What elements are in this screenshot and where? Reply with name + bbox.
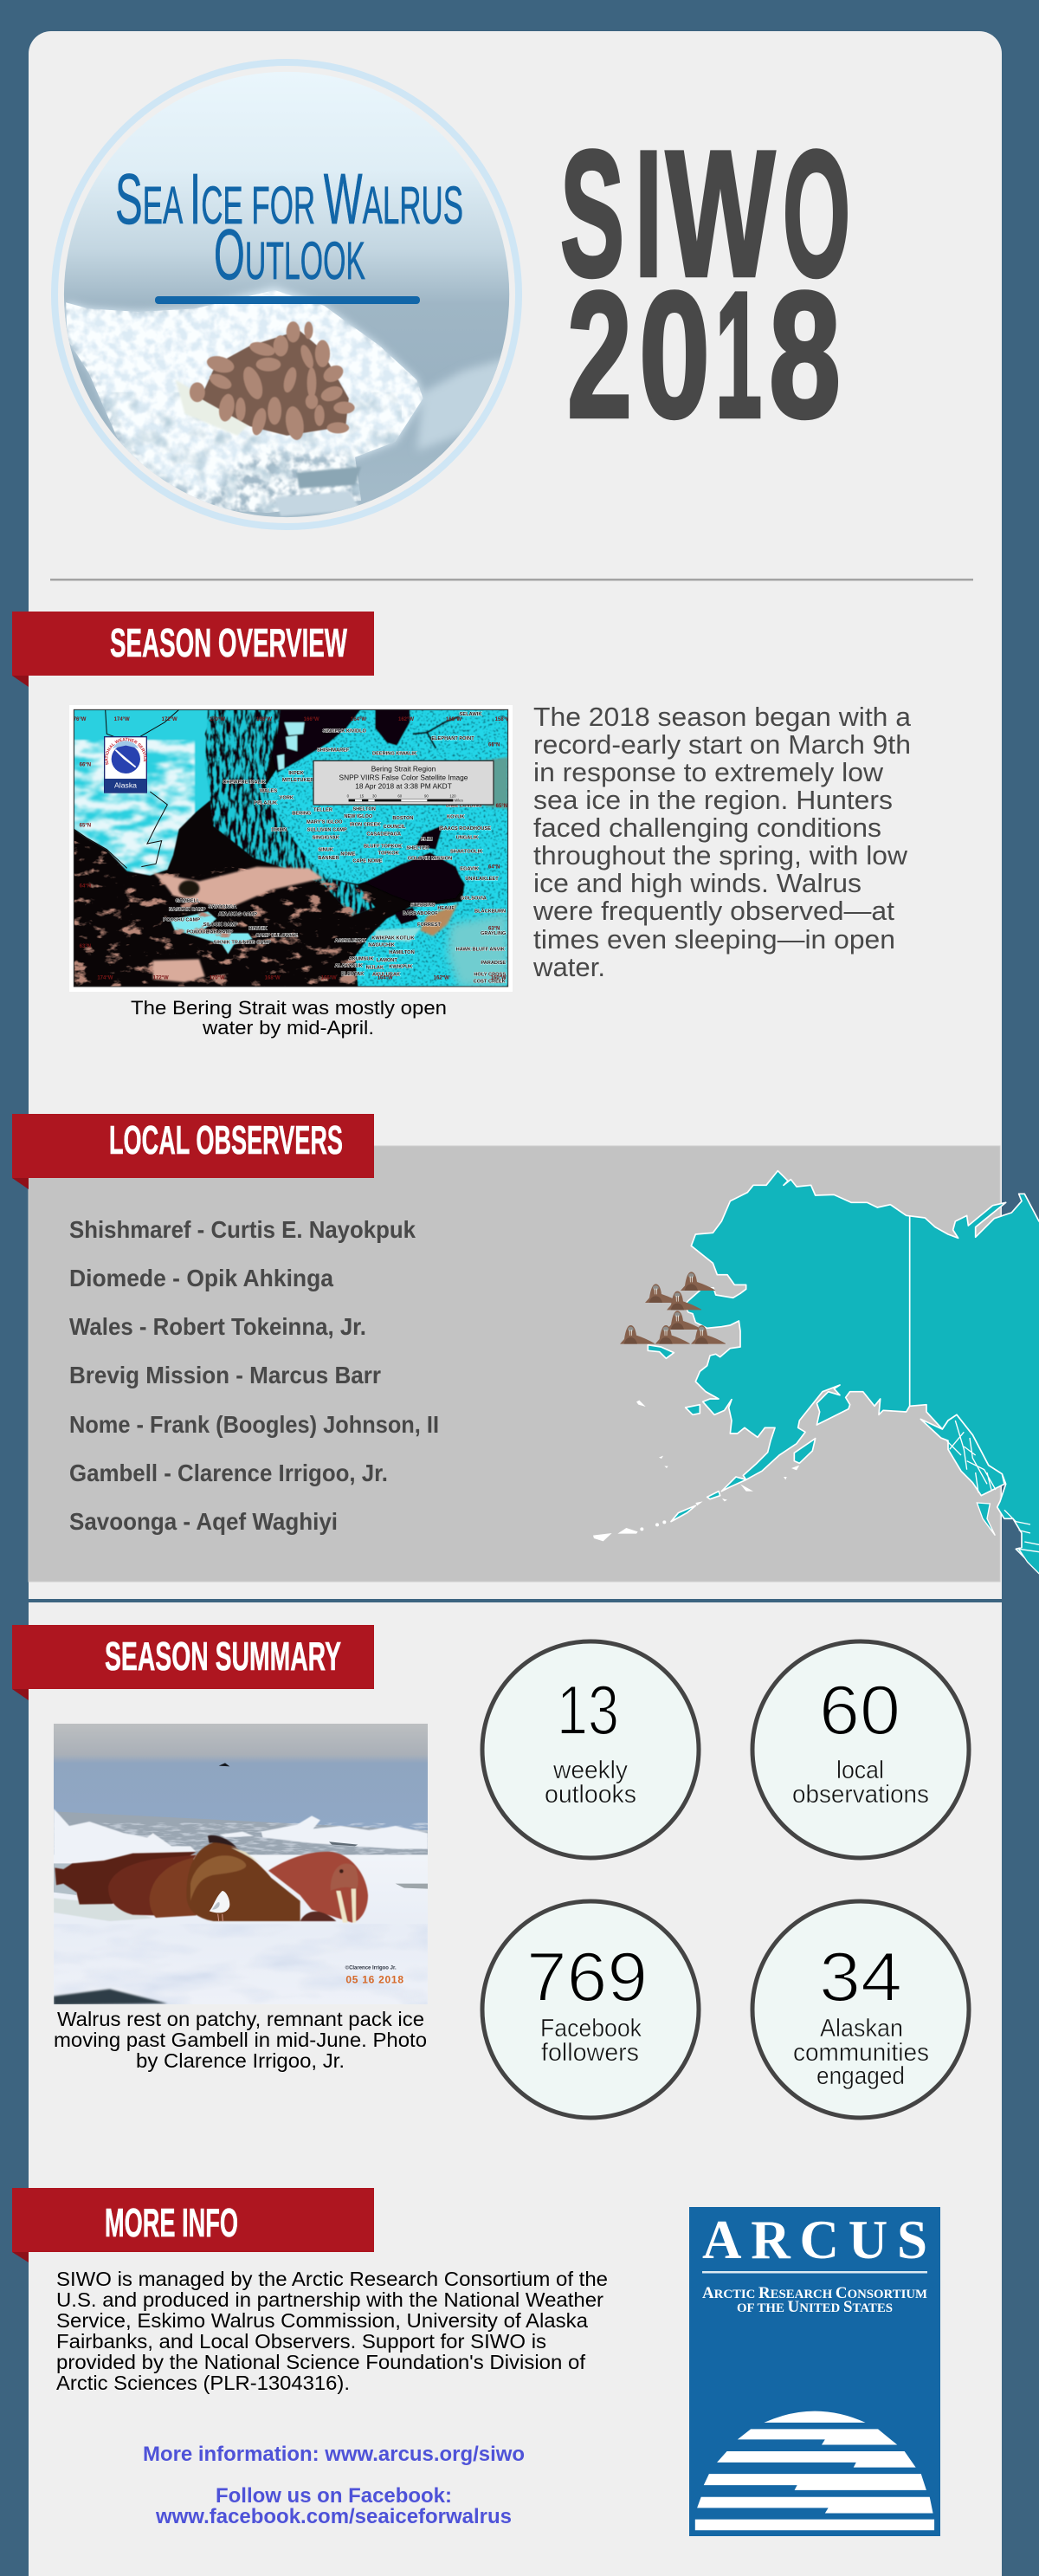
satellite: place labels: BARRABOROF [403,911,438,916]
photo: walrus resting on ice [54,1724,428,2005]
ARCUS logo: ARCTIC RESEARCH CONSORTIUM [702,2285,927,2302]
satellite: graticule labels: 162°W [398,717,414,722]
list: observer names: Nome - Frank (Boogles) Johnson, II [69,1411,439,1438]
satellite: clouds [74,841,394,987]
ARCUS dome emblem [695,2411,934,2530]
stat: 34 Alaskan communities engaged: Alaskan [820,2015,903,2042]
stat: 34 Alaskan communities engaged: engaged [816,2062,905,2090]
photo: gull [210,1891,229,1921]
satellite: title box: Bering Strait Region [371,765,436,773]
links: www.facebook.com/seaiceforwalrus [155,2505,512,2528]
season overview paragraph: water. [532,952,605,982]
satellite: title box: 18 Apr 2018 at 3:38 PM AKDT [355,782,452,791]
season overview paragraph: record-early start on March 9th [533,729,911,760]
satellite: graticule labels: 65°N [80,824,91,829]
stat: 13 weekly outlooks: outlooks [545,1781,636,1809]
satellite: place labels: UNGALIK [456,836,479,841]
photo: copyright stamp: 05 16 2018 [345,1973,403,1985]
satellite: place labels: SIKNIK TRAINING CAMP [214,941,271,946]
more info paragraph: SIWO is managed by the Arctic Research Consortium of the [56,2268,608,2290]
satellite: place labels: ELIM [421,838,433,843]
photo: copyright stamp [345,1965,403,1984]
satellite: place labels: KWIKPUK [389,965,413,970]
logo underline [155,296,420,304]
season overview paragraph: faced challenging conditions [533,812,881,843]
title: SIWO 2018: W [666,113,775,314]
satellite: graticule labels: 162°W [434,976,449,981]
satellite: graticule labels: 164°W [351,717,366,722]
satellite: title box: 60 [397,794,403,799]
satellite: place labels: KWIKPAK KOTLIK [371,935,415,941]
satellite: title box: Miles [455,798,463,802]
more info paragraph: Fairbanks, and Local Observers. Support for SIWO is [56,2330,546,2353]
stat: 60 local observations [752,1641,969,1858]
stat: 13 weekly outlooks: weekly [552,1757,628,1784]
satellite: graticule labels [70,717,511,981]
season overview paragraph: were frequently observed—at [532,896,894,926]
satellite: place labels: POOSHU CAMP [163,917,200,922]
section banner: Season Overview [12,612,374,687]
section banner: Season Overview: SEASON OVERVIEW [110,620,347,665]
links: Follow us on Facebook: [216,2484,452,2508]
more info paragraph [56,2268,608,2394]
satellite: place labels: CASADEPAGA [366,832,401,838]
satellite: place labels: IRON CREEK [350,823,381,828]
satellite: place labels: EGAVIK [460,867,480,872]
satellite: place labels: HAWK BLUFF ANVIK [456,948,506,953]
satellite: place labels: SAVOONGA [209,905,236,910]
satellite: place labels: SELAWIK [460,712,482,717]
more info paragraph: Arctic Sciences (PLR-1304316). [56,2372,350,2394]
satellite: place labels: SINGEAK KIVIDLO [323,728,367,734]
satellite: place labels: AKULURAK [372,973,401,978]
satellite: graticule labels: 65°N [496,804,507,809]
satellite: graticule labels: 64°N [488,865,500,871]
map: islands [648,1345,816,1522]
satellite: graticule labels: 66°N [80,763,91,768]
stat: 13 weekly outlooks: 13 [557,1672,619,1750]
walrus herd [190,321,355,442]
text: O [783,113,850,314]
satellite: place labels: KOYUK [447,814,465,819]
more info paragraph: U.S. and produced in partnership with the National Weather [56,2288,603,2311]
satellite: place labels: NOME [340,852,356,858]
satellite: title box: 0 [347,794,350,799]
satellite: graticule labels: 172°W [162,717,177,722]
satellite: title box [313,761,494,805]
satellite: place labels: GOLOVIN MISSION [408,857,452,862]
satellite: place labels: CAPE NOME [352,859,383,864]
satellite: place labels: SHAKTOOLIK [450,849,483,854]
season overview paragraph: The 2018 season began with a [533,702,912,732]
season overview paragraph: ice and high winds. Walrus [533,868,862,898]
photo caption: moving past Gambell in mid-June. Photo [54,2029,427,2051]
stat: 60 local observations: 60 [819,1672,900,1750]
satellite: graticule labels: 174°W [114,717,130,722]
ARCUS logo: ARCUS [702,2210,927,2270]
satellite: place labels: BETNIK [248,926,268,931]
satellite: graticule labels: 170°W [210,976,225,981]
photo: walruses [55,1835,368,1923]
title: SIWO 2018: 0 [639,255,710,455]
satellite: place labels: DIXON [271,828,287,833]
list: observer names: Diomede - Opik Ahkinga [69,1265,333,1291]
satellite: NWS Alaska logo: NATIONAL WEATHER SERVICE [105,738,147,765]
ARCUS logo: OF THE UNITED STATES [737,2299,893,2316]
stat: 13 weekly outlooks [482,1641,699,1858]
satellite: place labels [163,712,507,984]
map: Alaska panhandle islands [920,1414,1004,1496]
satellite: place labels: NEW IGLOO [344,814,373,819]
stat: 34 Alaskan communities engaged: 34 [819,1938,902,2016]
satellite: place labels: IKPEK [288,771,305,776]
satellite: place labels: GRAYLING [481,931,507,936]
satellite: place labels: UNALAKLEET [465,877,499,882]
section banner: Season Summary: SEASON SUMMARY [105,1634,341,1679]
satellite: place labels: DEERING KIWALIK [372,751,417,756]
stat: 60 local observations: observations [792,1781,929,1809]
list: observer names: Savoonga - Aqef Waghiyi [69,1508,338,1535]
stat: 769 Facebook followers: followers [541,2039,639,2067]
satellite: title box: 15 [359,794,365,799]
title: SIWO 2018: I [635,113,662,314]
more info paragraph: Service, Eskimo Walrus Commission, University of Alaska [56,2309,588,2332]
title: SIWO 2018: 1 [715,255,762,455]
satellite: graticule labels: 176°W [70,717,87,722]
satellite: place labels: NASKAK CAMP [169,907,206,912]
satellite: place labels: BLACKBURN [474,909,506,914]
stat: 769 Facebook followers [482,1901,699,2118]
satellite: graticule labels: 158°W [495,717,511,722]
satellite: place labels: FORREST [417,922,442,928]
satellite: place labels: HEAUF [437,906,455,911]
satellite: place labels: BERING [292,812,312,817]
satellite: place labels: AKUMSUK [349,957,374,962]
title: SIWO 2018: 2 [567,255,632,455]
satellite: place labels: PARADISE [481,961,506,966]
section banner: Season Summary [12,1625,374,1700]
season overview paragraph: in response to extremely low [533,757,884,787]
map: walrus markers [620,1272,726,1344]
title: SIWO 2018 [560,113,850,455]
satellite: place labels: BOSTON [392,816,413,821]
satellite: place labels: STEBBINS [410,903,436,908]
satellite: graticule labels: 160°W [446,717,461,722]
satellite: place labels: WALES [260,789,277,794]
satellite: place labels: PELAZUK [254,801,278,806]
satellite: place labels: ELEPHANT POINT [431,736,474,741]
panel: local observers [29,1146,1000,1582]
satellite: place labels: SILOOK CAMP [203,922,238,928]
section banner: Local Observers [12,1114,374,1189]
satellite: place labels: GOLSOVIA [461,896,487,902]
logo title: OUTLOOK [214,214,365,294]
stat: 34 Alaskan communities engaged: communities [793,2039,929,2067]
satellite: place labels: GAMBELL [176,899,200,904]
satellite: place labels: SINGIGYAK [313,836,340,841]
satellite: title box: SNPP VIIRS False Color Satellite Image [339,773,468,782]
satellite: place labels: DIME LANDING [446,804,482,809]
photo caption: by Clarence Irrigoo, Jr. [136,2049,345,2072]
satellite: coastlines [74,709,179,868]
satellite: place labels: NAGUCHIK [368,943,396,948]
satellite: title box: 30 [372,794,377,799]
season overview paragraph: sea ice in the region. Hunters [533,785,893,815]
satellite: place labels: TOPKOK [378,851,400,857]
satellite: place labels: ALAKANUK [335,964,364,969]
list: observer names [69,1216,439,1535]
satellite: graticule labels: 174°W [97,976,113,981]
satellite: place labels: SULLIVAN CAMP [307,827,347,832]
satellite: graticule labels: 164°W [378,976,393,981]
satellite: place labels: SINUK [318,848,334,853]
satellite: graticule labels: 66°N [488,742,500,748]
season overview paragraph [532,702,912,982]
satellite: graticule labels: 160°W [491,976,507,981]
title: SIWO 2018: S [560,113,624,314]
season overview paragraph: times even sleeping—in open [533,924,895,955]
satellite: title box: 120 [449,794,456,799]
satellite caption [131,997,447,1039]
satellite: west land and ice [74,709,508,987]
satellite: place labels: LAMONT [377,958,397,963]
section banner: More Info [12,2188,374,2262]
photo caption [54,2008,427,2072]
satellite: NWS Alaska logo: Alaska [114,781,137,790]
links [143,2443,525,2528]
satellite: place labels: AGERLEKAK [335,939,366,944]
satellite: place labels: HOLY CROSS [474,972,506,977]
satellite image panel [69,705,513,992]
satellite: place labels: COUNCIL [384,825,406,830]
photo: ice floes [54,1809,428,1855]
photo: flying bird [219,1763,229,1766]
satellite: graticule labels: 166°W [321,976,337,981]
ARCUS logo [689,2207,940,2536]
links: More information: www.arcus.org/siwo [143,2443,525,2466]
satellite: place labels: SHELTON [352,807,376,812]
list: observer names: Wales - Robert Tokeinna, Jr. [69,1313,366,1340]
list: observer names: Brevig Mission - Marcus Barr [69,1362,381,1388]
logo badge: Sea Ice for Walrus Outlook [55,62,519,527]
section banner: Local Observers: LOCAL OBSERVERS [109,1117,343,1162]
satellite: place labels: CHEWEDE INALIK [223,780,267,786]
satellite: graticule labels: 172°W [153,976,169,981]
stat: 769 Facebook followers: 769 [526,1938,648,2016]
photo: copyright stamp: ©Clarence Irrigoo Jr. [345,1964,397,1971]
section banner: More Info: MORE INFO [105,2200,238,2245]
satellite: place labels: COST CREEK [474,979,507,984]
satellite: place labels: BANNER [318,856,339,861]
map: Alaska with walrus markers [593,1171,1039,1585]
satellite: NWS Alaska logo [104,736,147,793]
satellite: place labels: ISAACS ROADHOUSE [439,826,491,832]
satellite: place labels: SHELTER [406,845,429,851]
satellite: graticule labels: 168°W [256,717,272,722]
list: observer names: Shishmaref - Curtis E. Nayokpuk [69,1216,416,1243]
satellite: graticule labels: 64°N [80,884,91,890]
photo caption: Walrus rest on patchy, remnant pack ice [57,2008,424,2030]
satellite: place labels: TELLER [313,808,332,813]
logo title [115,159,463,294]
satellite: place labels: CAMP KULOWIYE [255,934,298,939]
satellite: place labels: HAMILTON [389,950,415,955]
satellite: place labels: POWOOLIAK CAMP [186,930,233,935]
logo photo: walrus herd on ice floe [61,70,513,519]
satellite: place labels: NIJLAK [366,965,384,970]
list: observer names: Gambell - Clarence Irrigoo, Jr. [69,1460,388,1486]
more info paragraph: provided by the National Science Foundation's Division of [56,2351,586,2373]
satellite caption: water by mid-April. [202,1017,374,1039]
satellite: graticule labels: 63°N [80,944,91,949]
stat: 60 local observations: local [836,1757,884,1784]
satellite: place labels: MITLETUKERUK [282,778,322,783]
stat: 769 Facebook followers: Facebook [540,2015,642,2042]
satellite: place labels: BLUFF TOPKOK [364,844,403,849]
satellite: graticule labels: 170°W [210,717,225,722]
map: mainland [684,1171,1039,1576]
title: SIWO 2018: 8 [769,255,841,455]
satellite: place labels: YORK [280,796,294,801]
satellite: place labels: ATAAKAS CAMP [218,912,257,917]
satellite: place labels: MARY'S IGLOO [307,820,343,825]
satellite: place labels: SHISHMAREF [317,748,350,753]
satellite caption: The Bering Strait was mostly open [131,997,447,1019]
satellite: title box: 90 [424,794,429,799]
season overview paragraph: throughout the spring, with low [533,840,908,871]
satellite: place labels: ELEUTAK [341,972,365,977]
satellite: graticule labels: 63°N [488,926,500,931]
stat: 34 Alaskan communities engaged [752,1901,969,2118]
logo title: SEA ICE FOR WALRUS [115,159,463,239]
satellite: graticule labels: 166°W [304,717,319,722]
satellite: graticule labels: 168°W [265,976,281,981]
